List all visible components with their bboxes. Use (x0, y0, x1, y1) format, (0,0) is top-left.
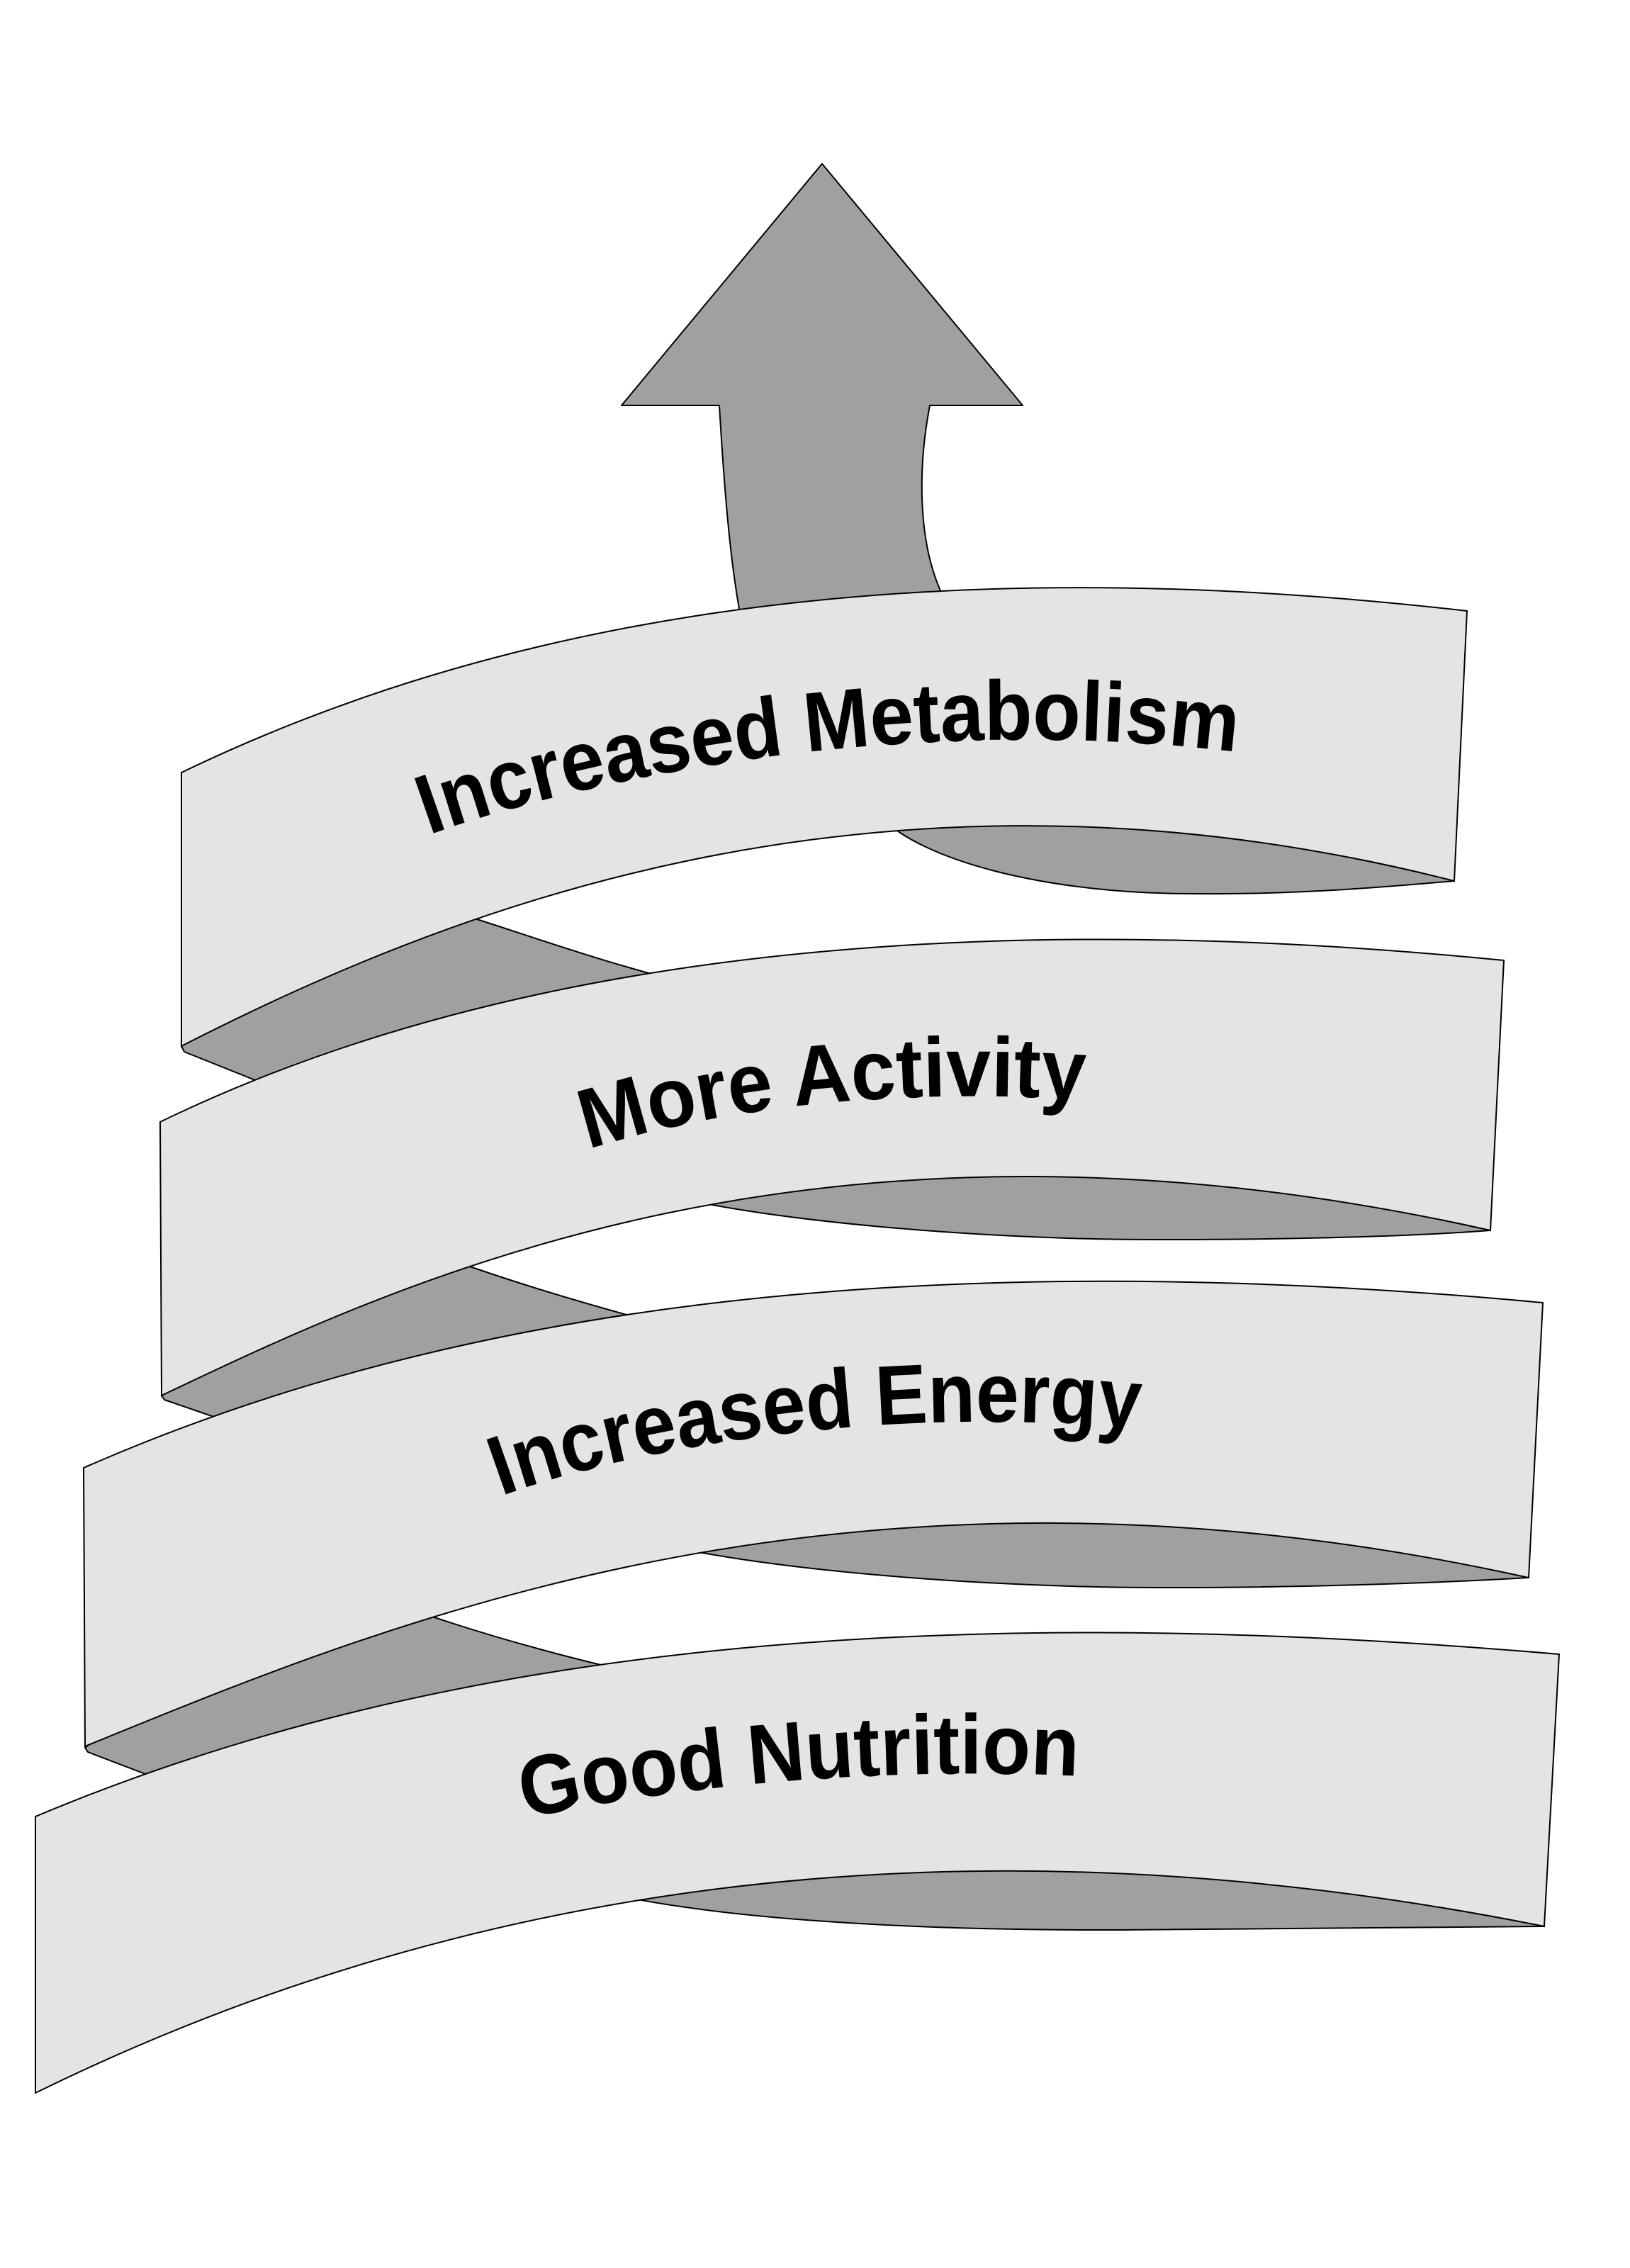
back fold: bottom ribbon right (609, 1793, 1544, 1930)
back fold: third ribbon left (85, 1581, 609, 1789)
ribbon: Increased Energy (83, 1280, 1544, 1748)
ribbon: Increased Metabolism (181, 587, 1468, 1048)
band (35, 1633, 1559, 2093)
back fold: top ribbon right (879, 744, 1454, 894)
label: More Activity (577, 1035, 1086, 1148)
label: Increased Metabolism (415, 679, 1235, 833)
back fold: second ribbon right (645, 1099, 1490, 1240)
band (160, 939, 1504, 1396)
arrow (622, 164, 1023, 617)
band (181, 588, 1467, 1046)
label: Good Nutrition (522, 1712, 1074, 1814)
label: Increased Energy (486, 1365, 1142, 1494)
band (84, 1281, 1543, 1746)
back fold: second ribbon left (162, 1233, 634, 1427)
ribbon: Good Nutrition (35, 1632, 1561, 2094)
ribbon: More Activity (159, 938, 1505, 1397)
back fold: top ribbon left (181, 886, 659, 1091)
back fold: third ribbon right (631, 1446, 1529, 1588)
